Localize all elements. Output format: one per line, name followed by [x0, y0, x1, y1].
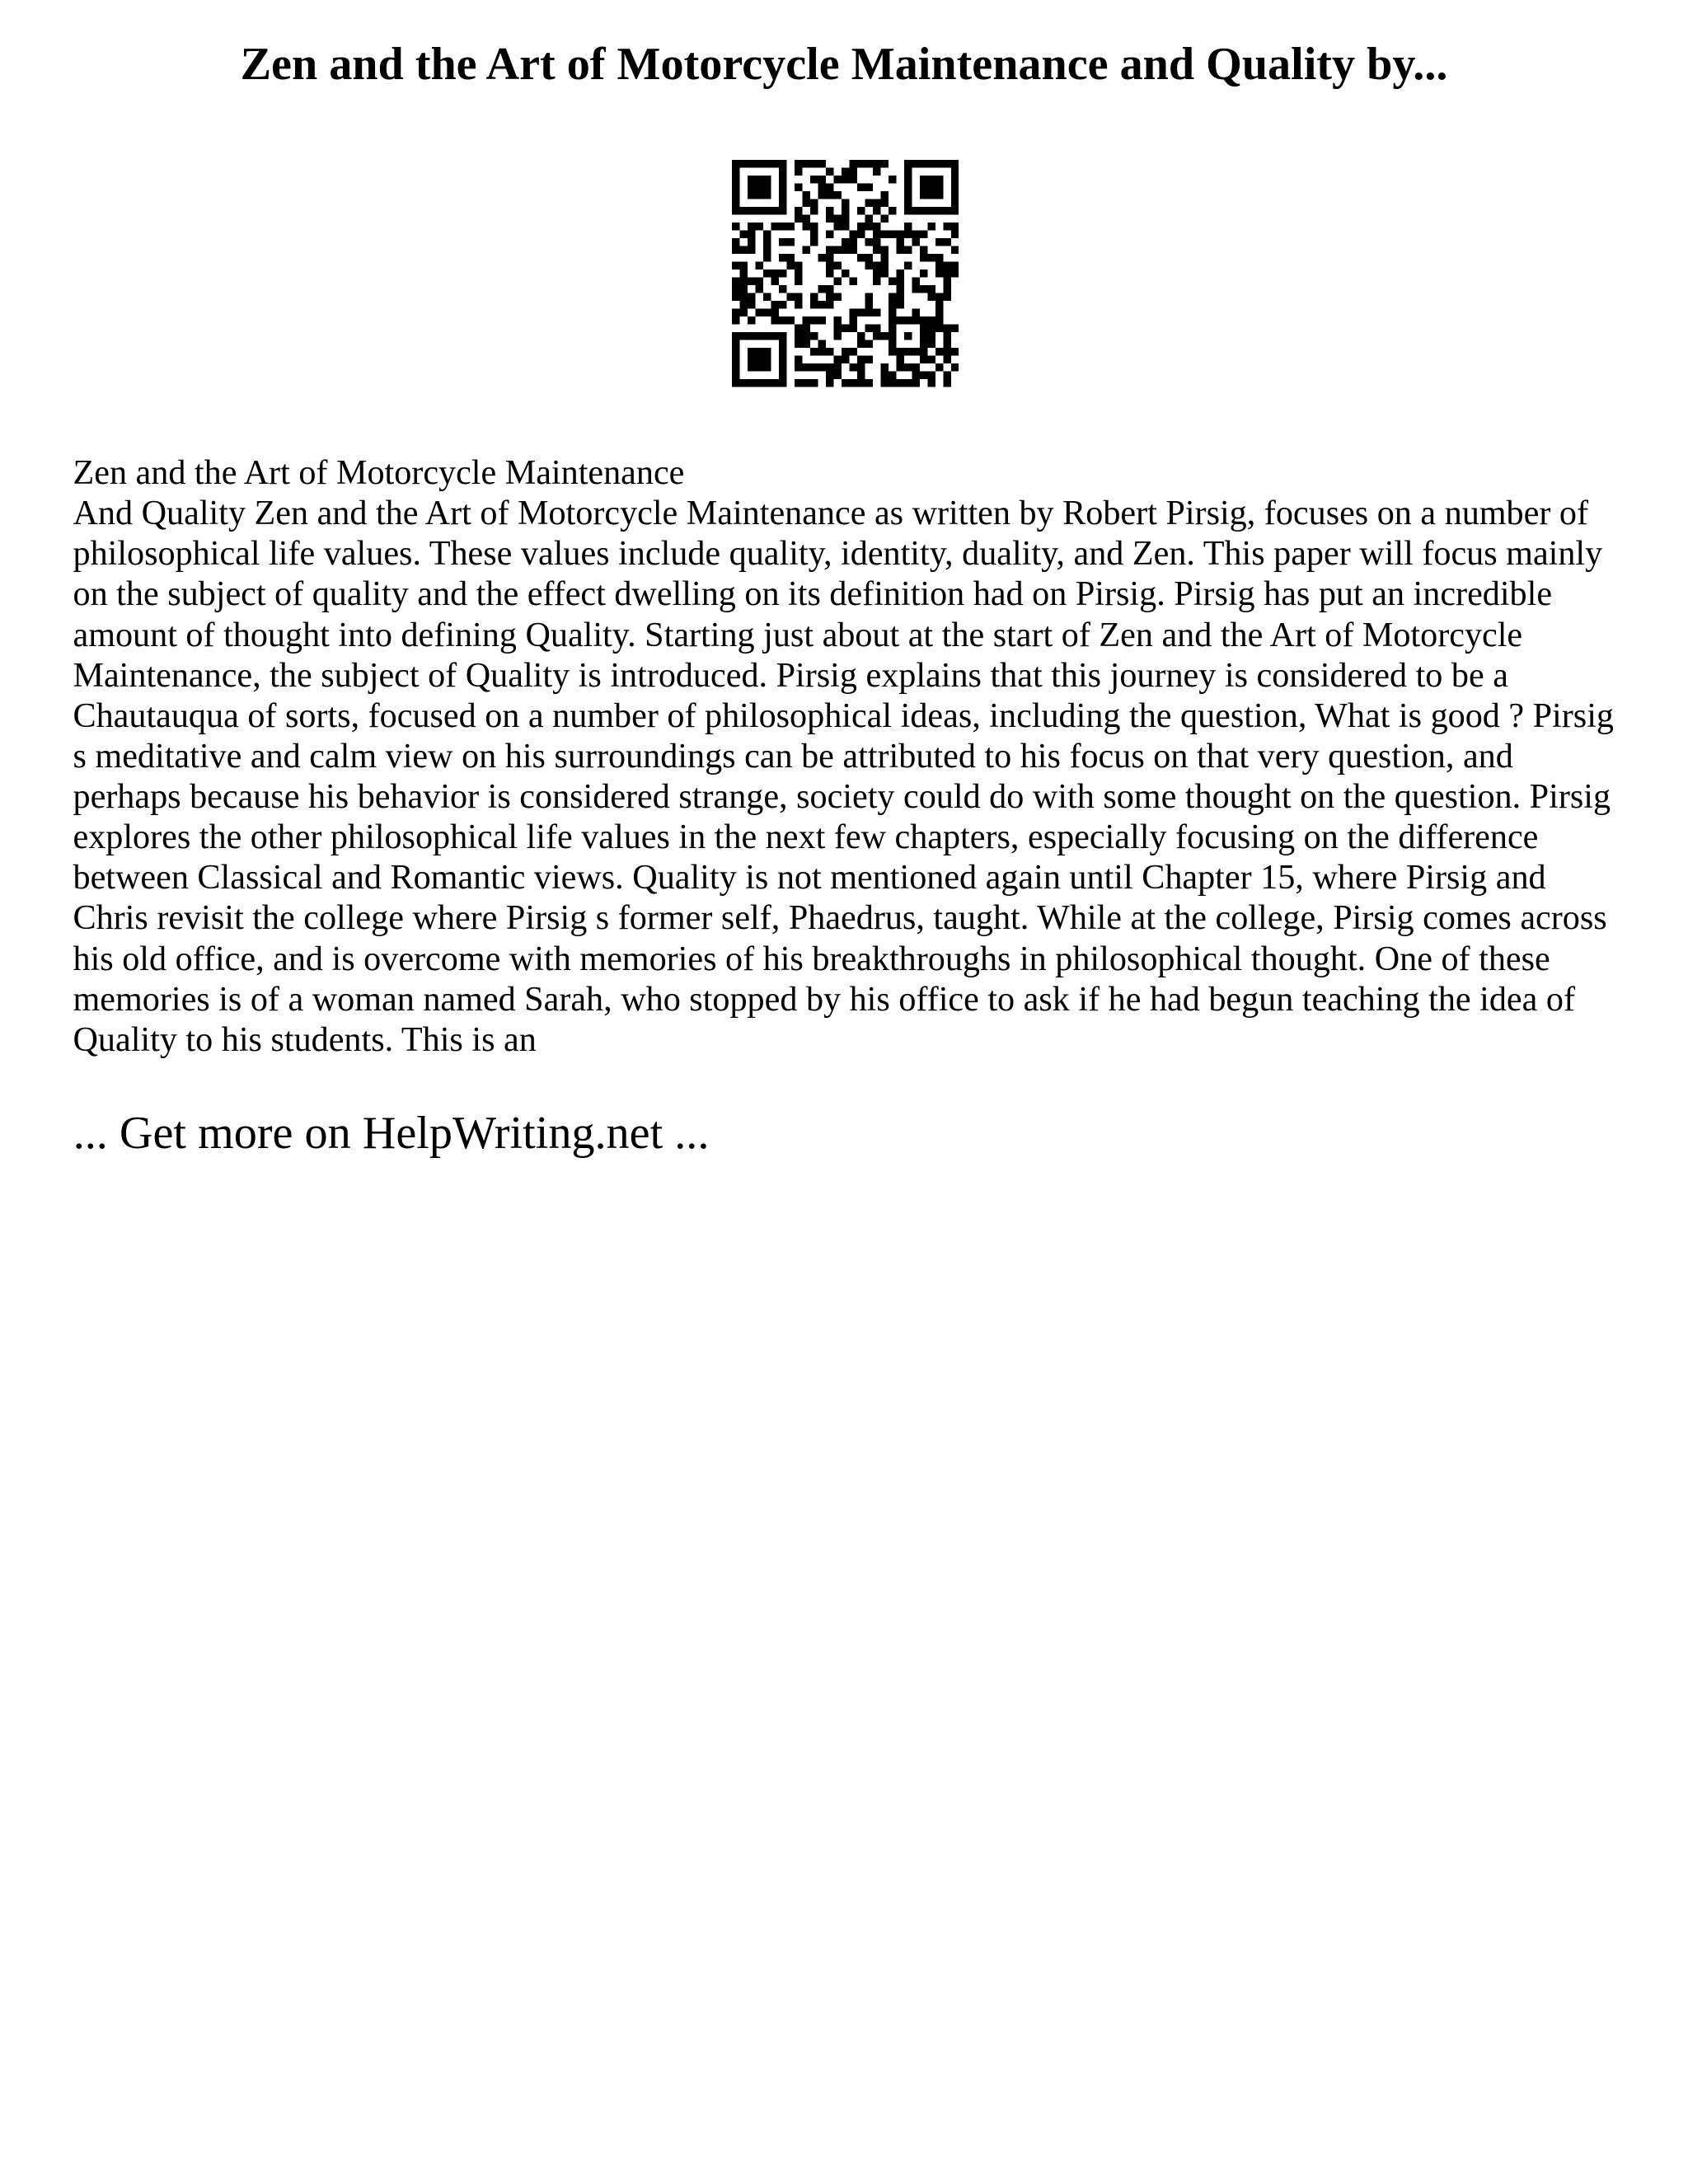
text block: body paragraph: Chautauqua of sorts, focused on a number of philosophical ideas, including the question, What is good ? Pirsig: [73, 696, 1614, 735]
text block: body paragraph: explores the other philosophical life values in the next few chapters, especially focusing on the difference: [73, 818, 1538, 856]
title: Zen and the Art of Motorcycle Maintenance and Quality by...: [241, 39, 1447, 90]
text block: body paragraph: [73, 453, 1614, 1059]
text block: body paragraph: between Classical and Romantic views. Quality is not mentioned again until Chapter 15, where Pirsig and: [73, 858, 1546, 897]
text block: body paragraph: philosophical life values. These values include quality, identity, duality, and Zen. This paper will focus mainly: [73, 534, 1602, 573]
text block: body paragraph: amount of thought into defining Quality. Starting just about at the start of Zen and the Art of Motorcycle: [73, 615, 1522, 654]
text block: body paragraph: Quality to his students. This is an: [73, 1020, 537, 1059]
text block: body paragraph: Chris revisit the college where Pirsig s former self, Phaedrus, taught. While at the college, Pirsig comes across: [73, 898, 1607, 937]
text block: body paragraph: Zen and the Art of Motorcycle Maintenance: [73, 453, 684, 492]
text block: body paragraph: perhaps because his behavior is considered strange, society could do with some thought on the question. Pirsig: [73, 777, 1611, 816]
text block: body paragraph: his old office, and is overcome with memories of his breakthroughs in philosophical thought. One of these: [73, 940, 1550, 977]
text block: body paragraph: on the subject of quality and the effect dwelling on its definition had on Pirsig. Pirsig has put an incredible: [73, 574, 1552, 613]
icon: QR code: [732, 160, 959, 387]
text block: body paragraph: And Quality Zen and the Art of Motorcycle Maintenance as written by Robert Pirsig, focuses on a number of: [73, 494, 1588, 532]
text block: body paragraph: Maintenance, the subject of Quality is introduced. Pirsig explains that this journey is considered to be a: [73, 656, 1508, 695]
text block: body paragraph: memories is of a woman named Sarah, who stopped by his office to ask if he had begun teaching the idea of: [73, 980, 1575, 1019]
call to action: ... Get more on HelpWriting.net ...: [73, 1108, 709, 1159]
text block: body paragraph: s meditative and calm view on his surroundings can be attributed to his focus on that very question, and: [73, 737, 1513, 776]
